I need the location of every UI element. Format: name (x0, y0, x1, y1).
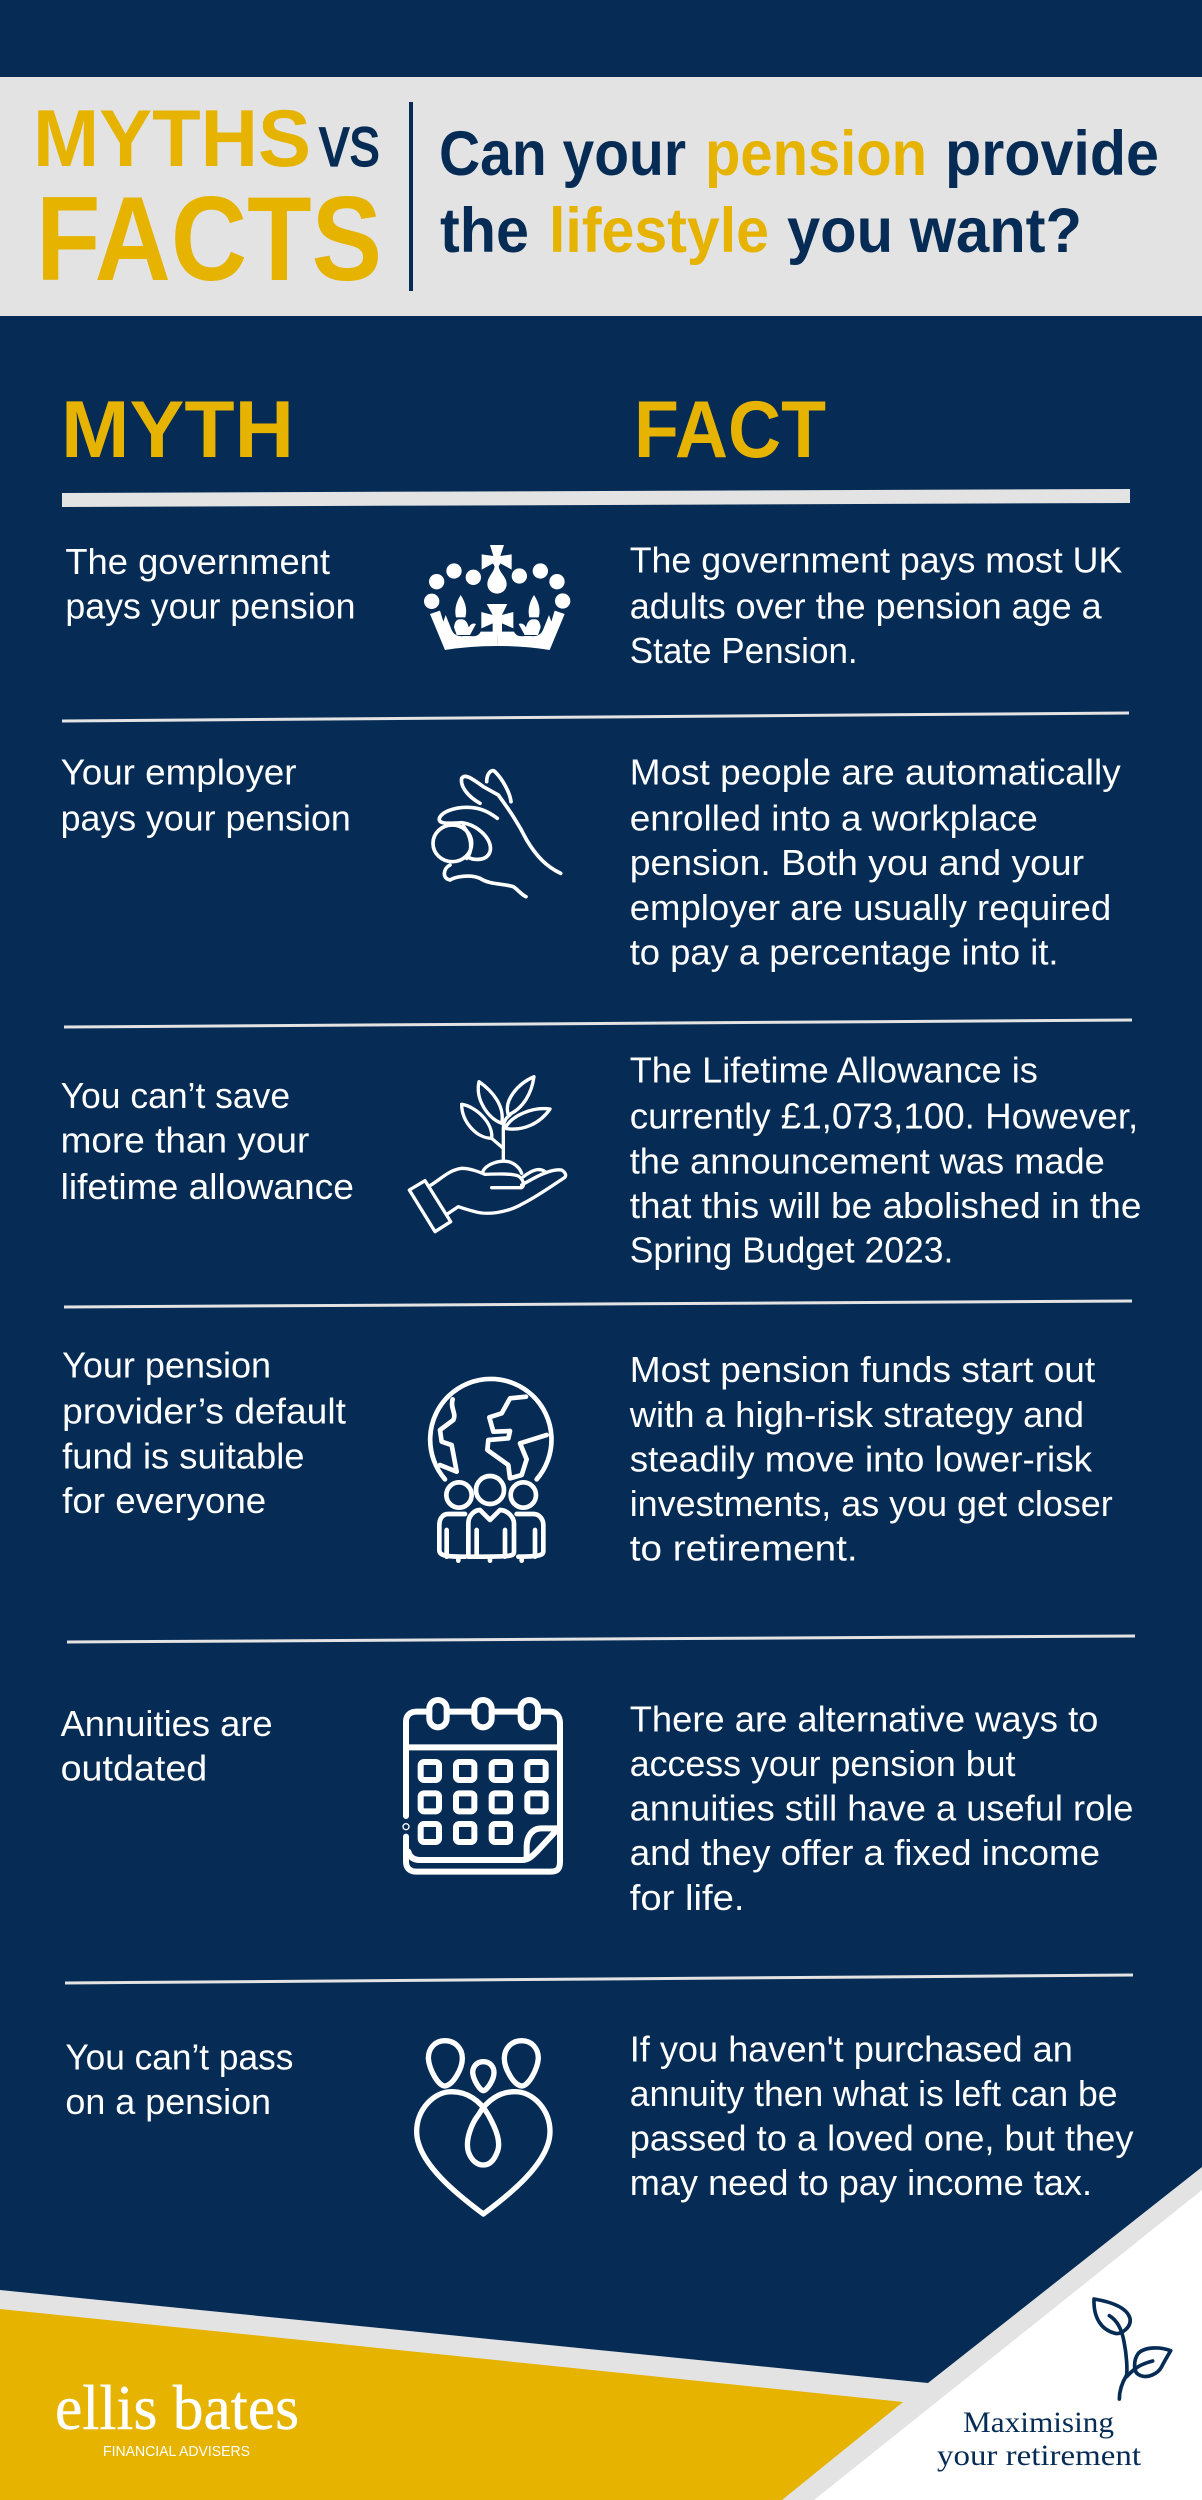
logo: ellis bates financial advisers: FINANCIAL ADVISERS (103, 2444, 250, 2460)
fact text: alternatives to annuities: There are alternative ways to (630, 1698, 1098, 1739)
title: can your pension provide the lifestyle you want: the (440, 196, 529, 266)
myth text: employer (61, 751, 351, 839)
fact text: high-risk strategy: steadily move into lower-risk (630, 1438, 1093, 1479)
column heading: fact: FACT (634, 385, 826, 475)
row 3: lifetime allowance (61, 1049, 1141, 1271)
myth text: annuities outdated (61, 1703, 273, 1789)
myth text: pass on a pension (65, 2036, 293, 2122)
fact text: high-risk strategy (629, 1349, 1113, 1569)
fact text: lifetime allowance abolished: that this will be abolished in the (630, 1185, 1141, 1226)
icon: crown (424, 545, 570, 650)
myth text: default fund: for everyone (62, 1480, 266, 1521)
heading: myths vs facts: MYTHS (33, 94, 311, 184)
fact text: passed to a loved one (630, 2028, 1133, 2203)
header band (0, 77, 1202, 316)
fact text: alternatives to annuities: for life. (630, 1877, 744, 1918)
fact text: state pension: The government pays most UK (630, 539, 1122, 580)
icon: hand holding coin (433, 771, 561, 897)
tagline: maximising your retirement: your retirement (937, 2439, 1142, 2472)
row 2: employer (61, 751, 1121, 972)
myth text: default fund: provider’s default (62, 1391, 346, 1432)
myth text: government (65, 541, 356, 627)
myth text: default fund: fund is suitable (62, 1435, 304, 1476)
heading: myths vs facts (33, 94, 382, 306)
icon: hand holding plant (409, 1077, 566, 1232)
title: can your pension provide the lifestyle you want: provide (945, 119, 1159, 189)
fact text: high-risk strategy: investments, as you get closer (630, 1483, 1113, 1524)
fact text: high-risk strategy: to retirement. (630, 1528, 858, 1569)
myth text: default fund: Your pension (62, 1344, 271, 1385)
myth text: annuities outdated: outdated (61, 1748, 207, 1789)
fact text: high-risk strategy: Most pension funds start out (630, 1349, 1095, 1390)
myth text: government: The government (65, 541, 330, 582)
fact text: alternatives to annuities (630, 1698, 1133, 1918)
tagline: maximising your retirement: Maximising (963, 2406, 1114, 2439)
title: can your pension provide the lifestyle you want: pension (705, 119, 927, 189)
fact text: passed to a loved one: may need to pay income tax. (630, 2162, 1092, 2203)
fact text: alternatives to annuities: and they offer a fixed income (630, 1832, 1100, 1873)
myth text: employer: Your employer (61, 751, 297, 792)
fact text: workplace pension (630, 751, 1121, 972)
column heading: myth: MYTH (61, 385, 294, 475)
myth text: lifetime allowance: more than your (61, 1120, 309, 1161)
myth text: lifetime allowance (61, 1075, 354, 1207)
fact text: state pension (630, 539, 1122, 671)
fact text: lifetime allowance abolished: the announcement was made (630, 1140, 1105, 1181)
myth text: pass on a pension: on a pension (65, 2081, 271, 2122)
row 5: annuities (61, 1698, 1133, 1918)
myth text: pass on a pension: You can’t pass (65, 2036, 293, 2077)
myth text: lifetime allowance: lifetime allowance (61, 1166, 354, 1207)
myth text: lifetime allowance: You can’t save (61, 1075, 290, 1116)
fact text: workplace pension: employer are usually required (630, 887, 1111, 928)
title: can your pension provide the lifestyle you want: Can your (439, 119, 686, 189)
fact text: workplace pension: enrolled into a workplace (630, 798, 1038, 839)
tagline: maximising your retirement (937, 2406, 1142, 2472)
heading: myths vs facts: FACTS (36, 172, 382, 306)
title: can your pension provide the lifestyle you want: lifestyle (549, 196, 769, 266)
fact text: workplace pension: Most people are automatically (630, 751, 1121, 792)
footer shapes (0, 2167, 1202, 2500)
myth text: employer: pays your pension (61, 798, 351, 839)
myth text: annuities outdated: Annuities are (61, 1703, 273, 1744)
fact text: alternatives to annuities: annuities still have a useful role (630, 1788, 1133, 1829)
icon: calendar (405, 1700, 560, 1872)
myth text: default fund (62, 1344, 346, 1521)
icon: globe and people (430, 1379, 551, 1561)
fact text: passed to a loved one: If you haven't purchased an (630, 2028, 1073, 2069)
title: can your pension provide the lifestyle you want (439, 119, 1159, 266)
fact text: alternatives to annuities: access your pension but (630, 1743, 1016, 1784)
fact text: workplace pension: pension. Both you and your (630, 842, 1084, 883)
fact text: lifetime allowance abolished (630, 1049, 1141, 1271)
title: can your pension provide the lifestyle you want: you want? (787, 196, 1082, 266)
heading: myths vs facts: vs (319, 102, 380, 182)
fact text: state pension: State Pension. (630, 630, 858, 671)
row 4: default fund (62, 1344, 1113, 1569)
fact text: state pension: adults over the pension age a (630, 586, 1103, 627)
fact text: passed to a loved one: annuity then what is left can be (630, 2073, 1118, 2114)
fact text: lifetime allowance abolished: Spring Budget 2023. (630, 1230, 953, 1271)
fact text: passed to a loved one: passed to a loved one, but they (630, 2118, 1133, 2159)
row 1: government (65, 539, 1122, 671)
icon: family heart (417, 2041, 550, 2214)
row 6: passing on a pension (65, 2028, 1133, 2214)
fact text: workplace pension: to pay a percentage into it. (630, 931, 1059, 972)
fact text: lifetime allowance abolished: currently £1,073,100. However, (630, 1096, 1138, 1137)
myth text: government: pays your pension (65, 586, 356, 627)
fact text: high-risk strategy: with a high-risk strategy and (629, 1394, 1084, 1435)
fact text: lifetime allowance abolished: The Lifetime Allowance is (630, 1049, 1038, 1090)
icon: sprout (1094, 2299, 1171, 2399)
logo: ellis bates financial advisers: ellis bates (55, 2372, 299, 2443)
